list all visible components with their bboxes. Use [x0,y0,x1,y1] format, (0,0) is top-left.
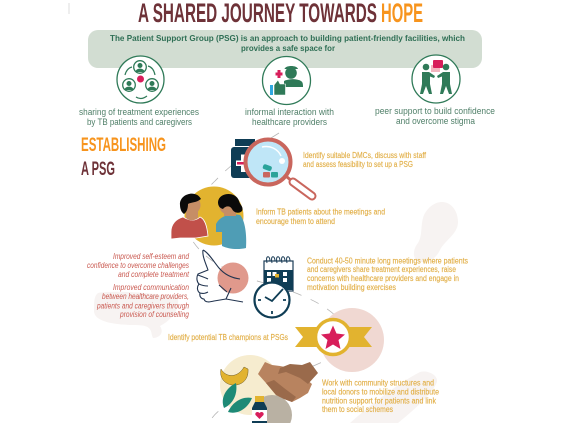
text: community structures: nutrition support for patients and link [322,396,436,406]
panel: PSG definition: The Patient Support Group (PSG) is an approach to building patient-friendly facilities, which [110,33,465,43]
text: improved communication: between healthcare providers, [102,292,189,301]
text: inform patients [256,208,385,226]
text: conduct meetings [307,256,468,292]
text: inform patients: Inform TB patients about the meetings and [256,208,385,216]
heading: establishing a PSG [81,134,166,180]
panel: PSG definition [88,30,482,68]
icon: calendar and clock [254,257,293,318]
text: community structures: Work with community structures and [322,378,434,388]
icon: healthcare provider [262,56,310,104]
text: conduct meetings: motivation building exercises [307,283,396,292]
icon: thumbs up [197,250,248,302]
text: improved communication [96,283,190,319]
text: improved communication: provision of counselling [119,310,190,319]
text: peer support [375,106,495,126]
text: conduct meetings: concerns with healthcare providers and engage in [307,274,459,283]
text: sharing experiences: by TB patients and caregivers [87,117,193,127]
icon: medal with star [295,308,384,372]
text: identify champions: Identify potential TB champions at PSGs [168,333,288,342]
text: improved communication: Improved communication [113,283,189,292]
text: inform patients: encourage them to attend [256,217,335,226]
text: improved self-esteem: and complete treatment [118,270,190,279]
text: identify DMCs [303,151,427,169]
text: informal interaction: healthcare providers [252,117,328,127]
text: community structures [322,378,439,414]
text: sharing experiences [79,107,200,127]
icon: medicine bottle and magnifier [231,139,312,196]
icon: nutrition support and handshake [220,355,318,423]
heading: establishing a PSG: ESTABLISHING [81,134,166,156]
text: peer support: and overcome stigma [396,116,475,126]
icon: two people talking [171,186,246,249]
text: conduct meetings: Conduct 40-50 minute long meetings where patients [307,256,468,266]
text: informal interaction: informal interaction with [245,107,334,117]
panel: PSG definition: provides a safe space for [241,43,336,53]
icon: peer support [412,55,460,103]
title [138,0,423,28]
text: sharing experiences: sharing of treatment experiences [79,107,200,117]
text: community structures: them to social schemes [322,405,393,414]
text: identify DMCs: Identify suitable DMCs, discuss with staff [303,151,427,160]
icon: sharing experiences [117,56,164,103]
text: identify DMCs: and assess feasibility to set up a PSG [303,160,413,169]
text: conduct meetings: and caregivers share treatment experiences, raise [307,265,456,274]
text: community structures: local donors to mobilize and distribute [322,388,439,396]
text: improved communication: patients and caregivers through [96,302,189,310]
text: informal interaction [245,107,334,127]
text: peer support: peer support to build confidence [375,106,495,116]
text: improved self-esteem: confidence to overcome challenges [87,261,189,270]
text: improved self-esteem: Improved self-esteem and [113,252,190,261]
journey dashed path [187,133,348,418]
heading: establishing a PSG: A PSG [81,158,115,180]
text: improved self-esteem [87,252,190,279]
